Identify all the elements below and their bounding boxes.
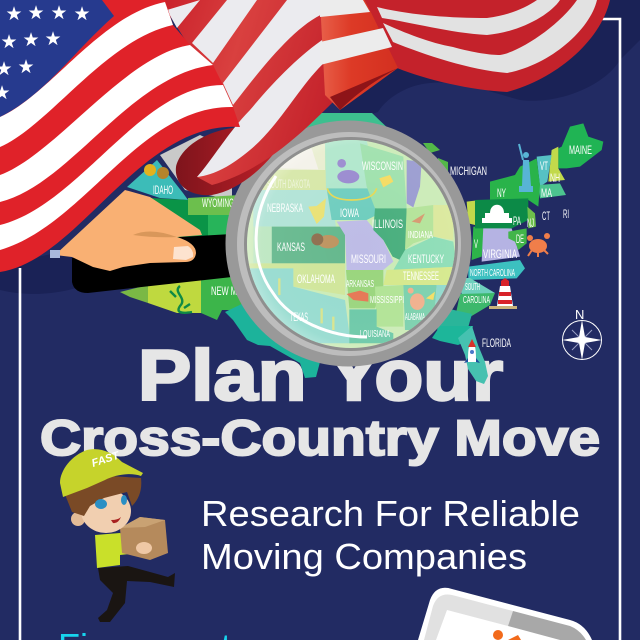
lens map: LOUISIANA xyxy=(360,329,390,340)
title xyxy=(40,337,600,466)
map labels: MAINE xyxy=(569,143,592,157)
map labels: IDAHO xyxy=(153,183,173,197)
title: Cross-Country Move xyxy=(40,410,600,466)
map: west states xyxy=(120,113,395,378)
flag: middle ribbon stripes xyxy=(167,0,325,177)
flag: stars: ★ xyxy=(44,28,62,50)
map labels: CAROLINA xyxy=(463,295,490,306)
lens map xyxy=(247,140,455,348)
computer device xyxy=(418,588,592,640)
map labels: VT xyxy=(540,159,548,173)
flag: end piece xyxy=(320,0,398,110)
icon: crab xyxy=(527,233,550,257)
lens map: OKLAHOMA xyxy=(297,272,335,286)
lens sheen xyxy=(247,140,455,348)
magnifying glass xyxy=(226,120,473,366)
map labels: NJ xyxy=(527,216,534,230)
flag: left wave white stripes xyxy=(0,2,233,250)
flag: stars: ★ xyxy=(5,3,23,25)
map labels: NORTH CAROLINA xyxy=(470,268,515,279)
map labels: MICHIGAN xyxy=(450,164,487,178)
icon: ornament xyxy=(327,188,377,200)
lens map: ARKANSAS xyxy=(346,279,374,290)
cut-off cyan heading xyxy=(58,626,231,640)
icon: cheese xyxy=(379,175,393,187)
lens ring xyxy=(226,120,472,366)
lens map: TEXAS xyxy=(290,310,308,324)
flag: stars: ★ xyxy=(17,56,35,78)
hand on box xyxy=(136,542,152,554)
map labels: NY xyxy=(497,186,506,200)
icon: bison xyxy=(311,233,339,248)
icon: desert plant xyxy=(170,286,192,313)
map labels: RI xyxy=(563,207,569,221)
dark swoosh behind the flag xyxy=(340,0,640,125)
flag: canton xyxy=(0,0,114,117)
dark shadow lower left xyxy=(0,250,110,294)
lens map: ILLINOIS xyxy=(372,217,403,231)
map labels: WYOMING xyxy=(202,196,234,210)
subtitle: Research For Reliable xyxy=(201,493,580,534)
flag: right waves xyxy=(365,0,610,92)
icon: Statue of Liberty xyxy=(519,144,533,192)
flag: stars: ★ xyxy=(73,3,91,25)
cap: FAST xyxy=(90,449,122,470)
map: east states xyxy=(467,123,603,280)
hand xyxy=(55,190,202,271)
flag: stars: ★ xyxy=(50,2,68,24)
lens map: NEBRASKA xyxy=(267,201,303,215)
flag xyxy=(0,0,610,272)
lens map: KENTUCKY xyxy=(408,252,444,266)
map labels: V xyxy=(474,237,478,251)
subtitle xyxy=(201,493,580,577)
lens map: MISSOURI xyxy=(351,252,386,266)
icon: small bird xyxy=(412,213,425,223)
icon: cactus xyxy=(279,278,333,330)
shirt xyxy=(95,533,138,568)
map labels: NEW M xyxy=(211,284,237,298)
cap xyxy=(60,449,143,497)
map labels: CT xyxy=(542,209,550,223)
lens map: IOWA xyxy=(340,206,359,220)
map labels: FLORIDA xyxy=(482,336,511,350)
map: Georgia xyxy=(437,308,472,330)
pants xyxy=(98,566,175,622)
lens map: GEORGIA xyxy=(447,312,468,323)
icon: fish xyxy=(347,291,368,302)
map: Florida xyxy=(432,326,488,384)
orange logo xyxy=(493,630,503,640)
subtitle: Moving Companies xyxy=(201,536,527,577)
lens map: TENNESSEE xyxy=(403,269,439,283)
shirt cuff xyxy=(50,250,60,258)
lens map: ALABAMA xyxy=(405,312,425,323)
map labels: DE xyxy=(516,232,524,246)
flag: stars xyxy=(0,2,91,104)
compass: N xyxy=(575,307,584,322)
map labels: VIRGINIA xyxy=(483,247,517,261)
flag: middle ribbon xyxy=(160,0,345,185)
map labels: MA xyxy=(541,186,552,200)
map labels: PA xyxy=(513,214,521,228)
icon: Mount Rushmore xyxy=(280,148,318,169)
map: Upper Michigan xyxy=(423,143,448,176)
lens map: INDIANA xyxy=(408,230,433,241)
compass xyxy=(562,307,602,360)
flag: stars: ★ xyxy=(0,31,18,53)
flag: stars: ★ xyxy=(22,29,40,51)
icon: dodo bird xyxy=(408,288,435,310)
lens map: MISSISSIPPI xyxy=(370,295,404,306)
lens map: KANSAS xyxy=(277,240,305,254)
lens map: SOUTH DAKOTA xyxy=(267,177,310,191)
map labels: NH xyxy=(550,171,560,185)
title: Plan Your xyxy=(138,337,503,416)
lens map: WISCONSIN xyxy=(362,159,403,173)
parcel box xyxy=(120,517,168,560)
flag: left wave red base xyxy=(0,0,240,272)
map: Carolinas xyxy=(455,278,495,318)
icon: duck xyxy=(337,159,359,183)
lens highlight xyxy=(256,176,367,337)
map labels xyxy=(153,143,592,350)
flag: stars: ★ xyxy=(27,2,45,24)
icon: lighthouse xyxy=(489,278,517,309)
map labels: SOUTH xyxy=(465,282,480,293)
icon: rocket xyxy=(464,339,480,363)
flag: loop underside xyxy=(176,110,290,195)
head xyxy=(64,476,141,533)
orange logo roof xyxy=(508,635,521,640)
icon: corn xyxy=(308,198,326,224)
icon: capitol building xyxy=(482,205,512,223)
mover character xyxy=(60,449,175,622)
magnifier handle xyxy=(72,234,232,293)
